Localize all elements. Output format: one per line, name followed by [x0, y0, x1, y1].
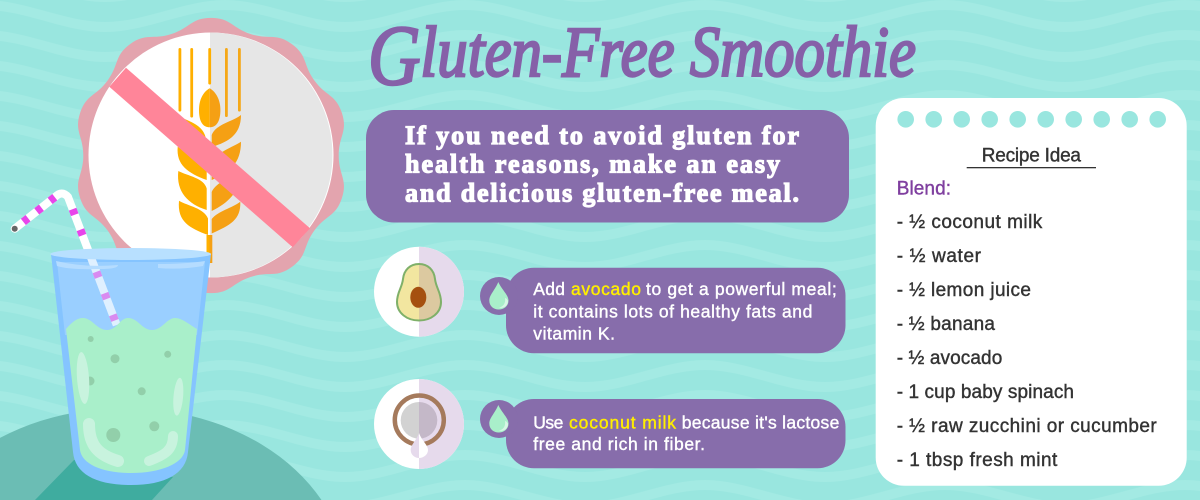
table	[0, 408, 322, 500]
ingredient list: - ½ banana	[897, 314, 995, 335]
icon: smoothie glass	[12, 194, 211, 485]
drop badge	[480, 400, 518, 438]
coconut text: free and rich in fiber.	[533, 434, 705, 454]
icon: no gluten badge	[78, 18, 344, 293]
coconut text: Use	[533, 412, 563, 432]
coconut text: because it's lactose	[682, 412, 839, 432]
panel: recipe card	[876, 98, 1187, 486]
drop badge	[480, 277, 518, 315]
badge disc	[88, 32, 334, 278]
panel: coconut tip	[480, 399, 846, 468]
intro text	[405, 121, 799, 208]
ingredient list: - ½ water	[897, 246, 982, 267]
title: luten-Free Smoothie	[420, 12, 916, 92]
avocado text: avocado	[571, 279, 641, 299]
ingredient list: - ½ coconut milk	[897, 212, 1043, 233]
icon: coconut	[374, 379, 464, 469]
bubbles	[86, 336, 171, 442]
badge scalloped border	[78, 18, 344, 293]
coconut text: coconut milk	[569, 412, 676, 432]
straw upper	[12, 194, 90, 255]
avocado text: vitamin K.	[533, 323, 615, 343]
liquid highlights	[75, 352, 185, 461]
ingredient list: - ½ raw zucchini or cucumber	[897, 416, 1157, 437]
intro text: and delicious gluten-free meal.	[405, 179, 799, 208]
title: G	[368, 7, 420, 103]
ingredient list: - ½ avocado	[897, 348, 1002, 369]
prohibition bar	[109, 68, 310, 247]
glass shadow	[35, 460, 173, 500]
panel: avocado tip	[480, 268, 846, 353]
intro text: If you need to avoid gluten for	[405, 121, 799, 150]
glass rim	[50, 248, 211, 260]
avocado text: to get a powerful meal;	[646, 279, 837, 299]
panel: intro	[366, 110, 849, 222]
binder holes	[897, 111, 1166, 128]
intro text: health reasons, make an easy	[405, 150, 780, 179]
glass body	[51, 254, 211, 485]
avocado text: Add	[533, 279, 565, 299]
blend label: Blend:	[897, 178, 951, 199]
icon: avocado	[374, 247, 464, 337]
smoothie liquid	[66, 318, 197, 473]
coconut text	[533, 412, 839, 454]
avocado text: it contains lots of healthy fats and	[533, 301, 812, 321]
recipe heading: Recipe Idea	[982, 146, 1081, 167]
icon: wheat	[178, 48, 241, 263]
avocado text	[533, 279, 837, 343]
ingredient list: - 1 tbsp fresh mint	[897, 450, 1058, 471]
straw in glass	[90, 255, 117, 325]
ingredient list	[897, 212, 1157, 471]
ingredient list: - ½ lemon juice	[897, 280, 1031, 301]
ingredient list: - 1 cup baby spinach	[897, 382, 1074, 403]
